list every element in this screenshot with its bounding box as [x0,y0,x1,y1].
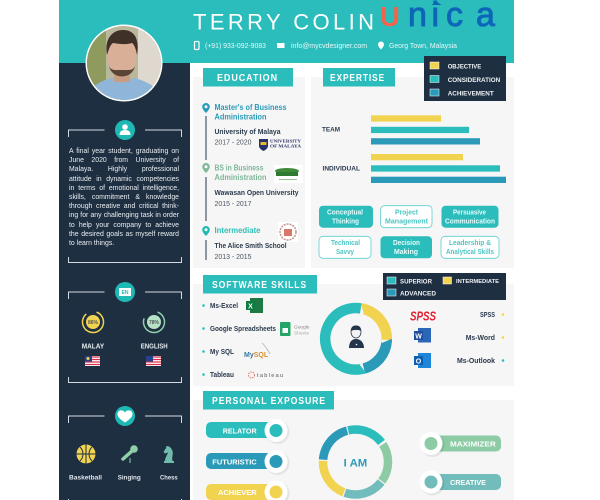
bio text: through creative and critical think- [69,203,179,210]
pill: project management: Project [395,210,419,216]
icon: language [115,282,135,302]
heading: personal exposure: PERSONAL EXPOSURE [212,396,326,407]
heading: personal exposure [203,391,334,410]
item: Ms-Outlook: O [416,358,422,366]
item: Ms-Word: Ms-Word [466,333,495,342]
legend: expertise: ACHIEVEMENT [448,90,494,98]
hobby labels: Chess [160,474,178,482]
education entry: bachelor: 2015 - 2017 [214,199,252,208]
heading: software skills [203,275,317,294]
trait: futuristic: FUTURISTIC [212,458,257,466]
donut chart: I AM: I AM [344,458,367,470]
bracket top [68,292,182,299]
trait: achiever: ACHIEVER [218,488,258,497]
bar chart: expertise [322,115,506,183]
language ring: Malay [80,309,106,335]
item: My SQL: MySQL [244,352,269,359]
item: Ms-Outlook [414,353,504,368]
icon: heart [115,406,135,426]
logo: Unica: U [380,1,400,32]
item: Google Spreadsheets: Google Spreadsheets [210,324,276,333]
education entry: masters [202,103,301,151]
item: Ms-Word: W [415,334,422,340]
legend: expertise [424,56,506,101]
bar chart: expertise: INDIVIDUAL [322,166,360,172]
education entry: intermediate: The Alice Smith School [214,241,286,250]
trait: creative: CREATIVE [450,478,486,487]
icon: person at laptop [349,326,364,348]
trait: creative [420,470,501,496]
flag: Malay [85,356,100,366]
pill: project management: Management [385,218,429,226]
hobby labels: Singing [118,474,141,482]
heading: education: EDUCATION [217,73,278,84]
legend: software: INTERMEDIATE [456,279,499,285]
header band [59,0,514,63]
language labels: MALAY [82,344,105,350]
education entry: masters: University of Malaya [214,127,281,136]
item: Tableau: tableau [257,373,284,379]
icon: basketball [76,444,96,464]
item: Tableau: Tableau [210,370,234,379]
icon: person [115,120,135,140]
trait: maximizer [420,432,501,457]
icon: microphone [123,445,138,463]
location: Georg Town, Malaysia [389,41,457,50]
item: Tableau [202,370,284,379]
bio text [69,148,180,247]
pill: decision making [380,236,432,258]
panel: personal exposure background [193,400,514,500]
legend: software: SUPERIOR [400,278,432,286]
sidebar section: hobbies [68,416,182,500]
education timeline line 1 [205,116,207,260]
hobby labels [69,474,178,482]
item: Google Spreadsheets: Google [294,324,310,330]
item: Ms-Excel: Ms-Excel [210,301,238,310]
legend: software [383,273,506,300]
pill: persuasive communication [442,206,498,228]
bio text: the desired goals as myself reward [69,231,179,238]
bio text: Malaya. Highly professional [69,166,179,173]
item: SPSS: SPSS [480,310,495,319]
item: Google Spreadsheets [202,322,310,336]
language ring: English [141,309,167,335]
language ring: Malay: 86% [88,320,99,326]
skill pills [319,206,499,258]
pill: conceptual thinking: Conceptual [327,210,363,216]
heading: education [203,68,293,86]
legend: expertise: CONSIDERATION [448,77,500,84]
education entry: masters: 2017 - 2020 [214,138,252,146]
flag: English [146,356,161,366]
bio text: June 2020 from University of [69,157,179,164]
logo: Alice Smith [278,222,298,242]
legend: software: ADVANCED [400,290,436,298]
hobby labels: Basketball [69,474,102,482]
pill: technical savvy: Savvy [336,249,354,256]
item: Google Spreadsheets: Sheets [294,330,310,336]
logo: Wawasan [274,165,303,183]
pill: project management [380,206,432,228]
sidebar [59,63,190,500]
icon: location pin [378,42,384,50]
bracket bottom [68,499,182,500]
donut chart: software skills [319,302,393,376]
item: My SQL [202,343,270,359]
heading: software skills: SOFTWARE SKILLS [212,280,307,291]
item: Ms-Excel [202,298,263,313]
icon: mail [277,43,284,48]
pill: persuasive communication: Communication [445,218,495,226]
item: SPSS: SPSS [410,310,437,324]
pill: leadership [441,236,499,258]
pill: conceptual thinking: Thinking [332,218,359,226]
item: SPSS [410,310,504,324]
pill: decision making: Making [394,249,418,256]
legend: expertise: OBJECTIVE [448,64,482,70]
bio text: in terms of emotional intelligence, [69,185,179,192]
education entry: bachelor: Administration [214,173,267,182]
icon: language: EN [122,290,129,296]
logo: University of Malaya [259,138,301,151]
education entry: intermediate: Intermediate [214,226,261,235]
software list right [410,310,504,368]
icon: phone [194,42,199,50]
education entry: bachelor: BS in Business [214,164,264,172]
bio text: skills, commitment & knowledge [69,194,179,201]
email: info@mycvdesigner.com [291,41,367,50]
language labels: ENGLISH [141,344,168,350]
item: Ms-Word [414,328,504,342]
panel: software skills background [193,284,514,386]
sidebar section: languages [68,292,182,382]
pill: leadership: Analytical Skills [446,249,494,256]
bio text: to help your company to achieve [69,222,179,228]
education entry: bachelor: Wawasan Open University [214,188,298,197]
pill: persuasive communication: Persuasive [453,210,486,216]
profile photo [86,24,162,102]
education entry: masters: Master's of Business [214,103,287,112]
heading: expertise: EXPERTISE [330,73,385,84]
bio text: ing for any challenging task in order [69,212,179,219]
trait: relator: RELATOR [223,426,258,436]
education entry: intermediate: 2013 - 2015 [214,252,252,261]
language labels [82,344,168,350]
bio text: to learn things. [69,240,114,247]
bio text: attitude in dynamic competencies [69,176,179,183]
phone number: (+91) 933-092-9083 [205,41,266,50]
trait: relator [206,419,290,444]
trait: futuristic [206,450,290,475]
icon: chess knight [164,446,174,463]
pill: leadership: Leadership & [449,240,491,247]
donut chart: I AM [310,416,401,500]
language ring: English: 78% [149,320,160,326]
heading: expertise [323,68,395,86]
item: My SQL: My SQL [210,347,235,356]
bracket bottom [68,377,182,382]
pill: conceptual thinking [319,206,373,228]
software list left [202,298,310,379]
contact row [194,41,457,50]
trait: maximizer: MAXIMIZER [450,440,497,448]
logo: University of Malaya: UNIVERSITY [270,138,301,144]
pill: decision making: Decision [393,240,420,247]
bar chart: expertise: TEAM [322,126,340,134]
bracket top [68,130,182,137]
pill: technical savvy: Technical [331,240,360,247]
pill: technical savvy [319,236,371,258]
education entry: masters: Administration [214,112,267,122]
title: TERRY COLIN [193,10,374,34]
education entry: intermediate [202,222,298,261]
panel: expertise background [311,77,514,268]
panel: education background [193,77,305,268]
bio text: A final year student, graduating on [69,148,179,155]
bracket bottom [68,257,182,262]
logo: University of Malaya: OF MALAYA [270,144,301,148]
sidebar section: about [68,130,182,262]
education entry: bachelor [202,163,303,208]
item: Ms-Excel: X [248,304,253,310]
item: Ms-Outlook: Ms-Outlook [457,356,495,365]
trait: achiever [206,480,290,500]
bracket top [68,416,182,423]
